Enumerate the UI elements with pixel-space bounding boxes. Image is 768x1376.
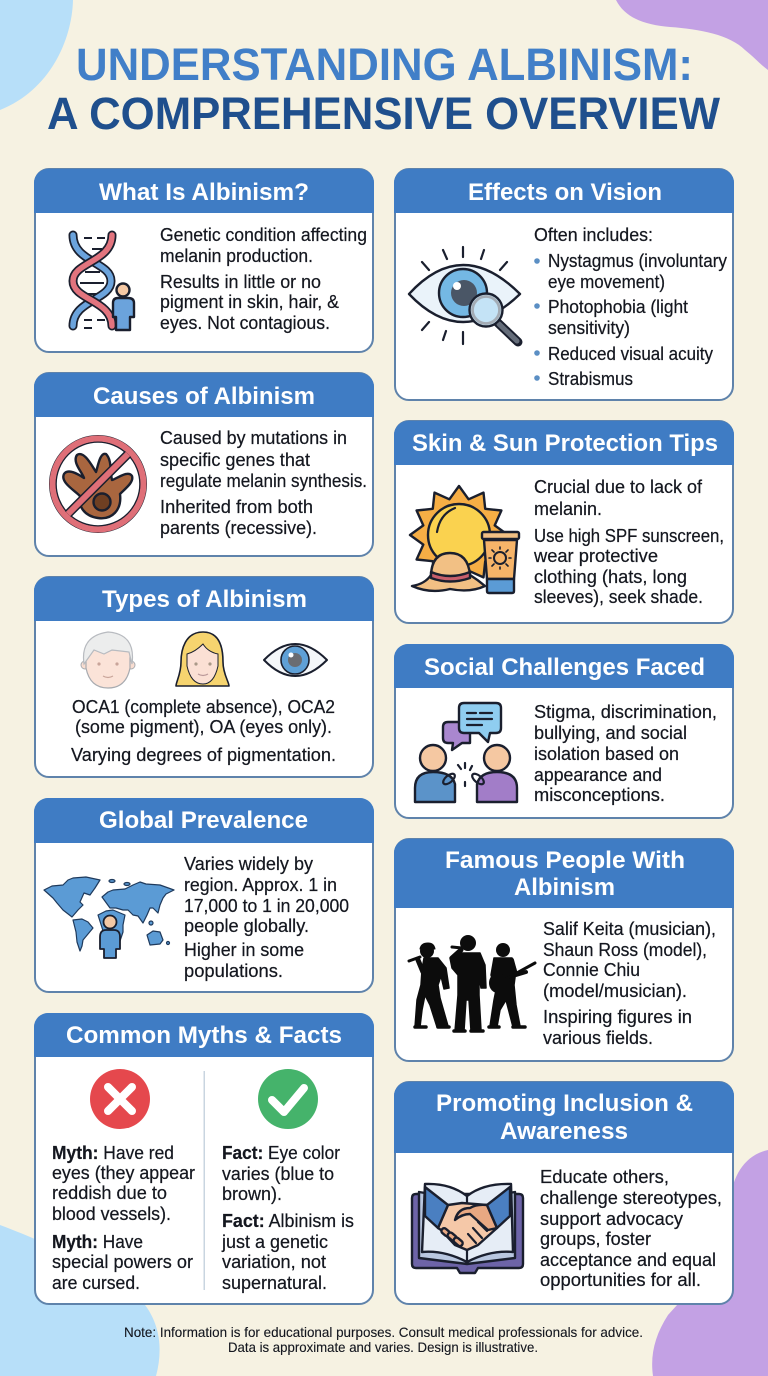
text block: promoting — [540, 1167, 722, 1290]
text block: promoting: challenge stereotypes, — [540, 1188, 722, 1208]
text block: social — [534, 702, 717, 805]
text block: vision list: Strabismus — [548, 369, 633, 389]
heading: famous people: Famous People With — [445, 847, 685, 874]
text block: vision list: Often includes: — [534, 225, 653, 245]
text block: vision list: Reduced visual acuity — [548, 344, 713, 364]
text block: what is albinism: Genetic condition affecting — [160, 225, 367, 245]
text block: facts: variation, not — [222, 1252, 326, 1272]
text block: global: region. Approx. 1 in — [184, 875, 337, 895]
title: UNDERSTANDING ALBINISM: — [76, 39, 693, 90]
background blob: bottom left — [0, 1225, 160, 1376]
text block: global: populations. — [184, 961, 283, 981]
heading: famous people: Albinism — [514, 874, 615, 901]
text block: facts: Fact: Eye color — [222, 1143, 340, 1163]
heading: promoting inclusion — [436, 1090, 693, 1145]
text block: social: bullying, and social — [534, 723, 687, 743]
text block: facts: Fact: Albinism is — [222, 1211, 354, 1231]
panel: causes of albinism — [34, 373, 374, 556]
panel: effects on vision — [394, 169, 734, 400]
text block: social: Stigma, discrimination, — [534, 702, 717, 722]
text block: promoting: Educate others, — [540, 1167, 669, 1187]
icon: sun, hat and sunscreen — [410, 486, 519, 593]
heading: skin and sun: Skin & Sun Protection Tips — [412, 430, 718, 457]
text block: skin — [533, 477, 724, 607]
text block: causes — [160, 428, 367, 538]
text block: famous: Salif Keita (musician), — [543, 919, 716, 939]
heading: promoting inclusion: Promoting Inclusion & — [436, 1090, 693, 1117]
background blob: top left — [0, 0, 73, 110]
text block: facts: brown). — [222, 1184, 282, 1204]
text block: promoting: support advocacy — [540, 1209, 683, 1229]
text block: skin: clothing (hats, long — [534, 567, 687, 587]
text block: global: people globally. — [184, 916, 309, 936]
text block: skin: melanin. — [534, 499, 602, 519]
text block: myths: blood vessels). — [52, 1204, 171, 1224]
panel: what is albinism — [34, 169, 374, 352]
icon: eye with magnifier — [409, 247, 520, 344]
text block: famous: Shaun Ross (model), — [543, 940, 707, 960]
title — [47, 39, 721, 139]
text block: facts — [221, 1143, 354, 1293]
text block: famous — [543, 919, 716, 1048]
text block: what is albinism: Results in little or no — [160, 272, 321, 292]
icon: people with broken link and speech bubbles — [415, 703, 517, 802]
text block: myths: reddish due to — [52, 1183, 167, 1203]
text block: myths: are cursed. — [52, 1273, 140, 1293]
text block: facts: supernatural. — [222, 1273, 327, 1293]
text block: myths: Myth: Have red — [52, 1143, 174, 1163]
text block: causes: parents (recessive). — [160, 518, 317, 538]
text block: what is albinism — [160, 225, 367, 333]
text block: types: OCA1 (complete absence), OCA2 — [72, 697, 335, 717]
heading: social challenges: Social Challenges Faced — [424, 654, 705, 681]
text block: vision list: Nystagmus (involuntary — [548, 251, 727, 271]
text block: myths: eyes (they appear — [52, 1163, 195, 1183]
footer note: Data is approximate and varies. Design is illustrative. — [228, 1339, 538, 1355]
text block: famous: (model/musician). — [543, 981, 687, 1001]
heading: effects on vision: Effects on Vision — [468, 179, 662, 206]
icon: green check — [258, 1069, 318, 1129]
title: A COMPREHENSIVE OVERVIEW — [47, 88, 721, 139]
text block: what is albinism: eyes. Not contagious. — [160, 313, 330, 333]
text block: vision list: Photophobia (light — [548, 297, 688, 317]
heading: common myths and facts: Common Myths & Facts — [66, 1022, 342, 1049]
text block: facts: just a genetic — [221, 1232, 328, 1252]
divider — [204, 1071, 205, 1290]
panel: global prevalence — [34, 798, 374, 992]
text block: famous: various fields. — [543, 1028, 653, 1048]
icon: eye — [264, 644, 327, 676]
text block: types — [71, 697, 336, 765]
background blob: bottom right — [652, 1150, 768, 1376]
text block: what is albinism: pigment in skin, hair, & — [160, 292, 339, 312]
heading: global prevalence: Global Prevalence — [99, 807, 308, 834]
heading: causes of albinism: Causes of Albinism — [93, 383, 315, 410]
text block: vision list: sensitivity) — [548, 318, 630, 338]
text block: causes: Inherited from both — [160, 497, 313, 517]
panel: social challenges — [394, 644, 734, 818]
text block: promoting: opportunities for all. — [540, 1270, 701, 1290]
background blob: top right — [616, 0, 768, 70]
text block: promoting: groups, foster — [540, 1229, 651, 1249]
icon: prohibited melanocyte — [50, 436, 146, 532]
text block: vision list — [534, 225, 727, 389]
text block: facts: varies (blue to — [222, 1164, 334, 1184]
icon: world map with person — [44, 877, 174, 958]
text block: types: (some pigment), OA (eyes only). — [75, 717, 332, 737]
text block: myths: special powers or — [52, 1252, 193, 1272]
heading: types of albinism: Types of Albinism — [102, 586, 307, 613]
text block: myths — [52, 1143, 195, 1293]
text block: famous: Inspiring figures in — [543, 1007, 692, 1027]
text block: causes: Caused by mutations in — [160, 428, 347, 448]
text block: myths: Myth: Have — [52, 1232, 143, 1252]
text block: global: 17,000 to 1 in 20,000 — [184, 896, 349, 916]
heading: what is albinism: What Is Albinism? — [99, 179, 309, 206]
footer note — [124, 1324, 643, 1355]
icon: dna with person — [73, 235, 134, 330]
text block: global: Varies widely by — [184, 854, 313, 874]
text block: types: Varying degrees of pigmentation. — [71, 745, 336, 765]
text block: skin: sleeves), seek shade. — [534, 587, 703, 607]
text block: famous: Connie Chiu — [543, 960, 640, 980]
heading: famous people — [445, 847, 685, 901]
icon: open book with handshake — [412, 1184, 523, 1273]
icon: blonde face — [176, 632, 229, 686]
panel: common myths and facts — [34, 1013, 374, 1304]
icon: red cross — [90, 1069, 150, 1129]
text block: social: appearance and — [534, 765, 662, 785]
panel: promoting inclusion — [394, 1082, 734, 1304]
panel: famous people — [394, 839, 734, 1061]
panel: types of albinism — [34, 577, 374, 777]
text block: global — [184, 854, 349, 981]
text block: skin: Crucial due to lack of — [534, 477, 703, 497]
text block: what is albinism: melanin production. — [160, 246, 313, 266]
heading: promoting inclusion: Awareness — [500, 1118, 628, 1145]
text block: vision list: eye movement) — [548, 272, 665, 292]
text block: causes: regulate melanin synthesis. — [160, 471, 367, 491]
text block: causes: specific genes that — [160, 450, 310, 470]
panel: skin and sun protection — [394, 421, 734, 623]
icon: musician silhouettes — [409, 935, 535, 1031]
text block: social: isolation based on — [534, 744, 679, 764]
icon: white hair face — [81, 632, 135, 688]
text block: skin: Use high SPF sunscreen, — [534, 526, 724, 546]
footer note: Note: Information is for educational purposes. Consult medical professionals for advice. — [124, 1324, 643, 1340]
text block: global: Higher in some — [184, 940, 304, 960]
text block: social: misconceptions. — [534, 785, 665, 805]
text block: promoting: acceptance and equal — [540, 1250, 716, 1270]
text block: skin: wear protective — [533, 546, 658, 566]
